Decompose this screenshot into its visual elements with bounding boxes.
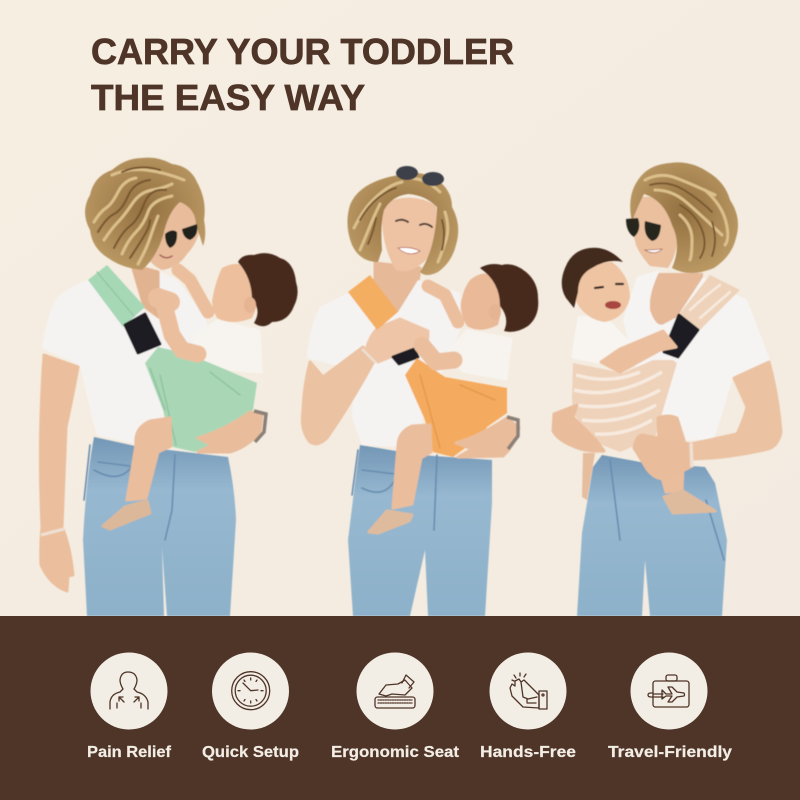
baby face bbox=[212, 264, 258, 322]
baby shirt bbox=[194, 321, 261, 372]
background bbox=[0, 0, 800, 616]
neck bbox=[132, 265, 159, 317]
icon: suitcase and plane bbox=[648, 675, 689, 707]
watch bbox=[507, 417, 518, 449]
jeans details bbox=[610, 460, 724, 560]
pouch bbox=[572, 360, 677, 452]
face bbox=[143, 197, 200, 270]
baby arm bbox=[601, 331, 676, 372]
baby face bbox=[461, 273, 501, 330]
hair curls bbox=[94, 167, 184, 264]
icon: hand gesture bbox=[510, 673, 547, 709]
t-shirt bbox=[42, 272, 207, 444]
feature: ergonomic seat bbox=[331, 652, 459, 761]
footer band bbox=[0, 616, 800, 800]
strap stripes bbox=[690, 285, 730, 318]
label: Pain Relief bbox=[87, 744, 172, 761]
hair bbox=[630, 162, 738, 273]
feature: pain relief bbox=[87, 652, 172, 761]
mother right hand bbox=[456, 418, 519, 457]
mother hand bbox=[366, 319, 428, 362]
sunglasses bbox=[165, 224, 197, 248]
hair curls bbox=[645, 175, 728, 260]
baby hair bbox=[562, 248, 623, 308]
strap fold bbox=[97, 272, 134, 316]
baby ear bbox=[489, 304, 501, 320]
bracelet bbox=[691, 443, 692, 467]
t-shirt bbox=[307, 280, 460, 448]
figure: mother with mint carrier bbox=[40, 158, 298, 616]
pouch bbox=[405, 358, 507, 457]
buckle bbox=[125, 314, 160, 353]
mother right hand bbox=[198, 412, 262, 452]
bracelet bbox=[362, 349, 376, 363]
shoe bbox=[369, 511, 412, 533]
title: CARRY YOUR TODDLER bbox=[91, 31, 514, 72]
jeans details bbox=[352, 450, 437, 530]
icon: clock bbox=[232, 672, 270, 710]
label: Ergonomic Seat bbox=[331, 744, 459, 761]
zebra stripes bbox=[574, 372, 662, 434]
pouch folds bbox=[420, 375, 495, 448]
bracelet bbox=[41, 529, 64, 535]
buckle bbox=[664, 315, 698, 357]
mother arm bbox=[302, 347, 373, 444]
strap bbox=[677, 275, 740, 330]
circle bbox=[490, 652, 566, 730]
label: Hands-Free bbox=[480, 744, 576, 761]
t-shirt bbox=[623, 270, 770, 440]
circle bbox=[212, 652, 289, 730]
figure: mother with zebra carrier bbox=[553, 162, 781, 616]
baby leg bbox=[658, 416, 684, 492]
baby hair bbox=[480, 264, 538, 332]
icon: shoulders bbox=[110, 672, 148, 709]
baby mouth bbox=[605, 301, 621, 309]
strap bbox=[348, 275, 398, 330]
baby eyes bbox=[595, 284, 623, 288]
baby face bbox=[575, 262, 630, 322]
hair bbox=[347, 173, 458, 275]
face bbox=[630, 197, 678, 268]
jeans bbox=[348, 445, 492, 616]
other foot bbox=[582, 453, 595, 500]
icon: hand on cushion bbox=[375, 675, 415, 708]
title bbox=[91, 31, 514, 118]
baby leg bbox=[393, 425, 431, 508]
sunglasses on head bbox=[396, 166, 444, 186]
smile bbox=[160, 255, 172, 258]
baby leg bbox=[127, 418, 171, 500]
baby arms bbox=[158, 270, 208, 354]
jeans bbox=[83, 437, 236, 616]
baby hair bbox=[238, 253, 298, 326]
mother hands bbox=[553, 405, 692, 479]
jeans bbox=[577, 455, 727, 616]
jeans details bbox=[84, 445, 175, 540]
mother right arm bbox=[691, 362, 781, 459]
pouch bbox=[145, 347, 257, 452]
feature: quick setup bbox=[202, 652, 299, 761]
figure: mother with orange carrier bbox=[302, 166, 538, 616]
baby ear bbox=[244, 297, 256, 313]
watch bbox=[254, 411, 266, 442]
hair bbox=[85, 158, 205, 270]
smile bbox=[645, 249, 662, 253]
neck bbox=[375, 263, 420, 317]
circle bbox=[630, 652, 708, 730]
eyes bbox=[396, 220, 432, 227]
neck bbox=[650, 273, 703, 325]
feature: hands-free bbox=[480, 652, 576, 761]
face bbox=[382, 198, 437, 271]
baby shirt bbox=[573, 316, 632, 362]
mother left arm and hand bbox=[40, 355, 78, 591]
pouch folds bbox=[150, 368, 240, 445]
sunglasses bbox=[626, 218, 661, 241]
shoe bbox=[664, 491, 715, 513]
title: THE EASY WAY bbox=[91, 77, 365, 118]
shoe bbox=[103, 501, 150, 529]
baby shirt bbox=[448, 331, 511, 379]
label: Travel-Friendly bbox=[608, 744, 732, 761]
strap bbox=[88, 265, 145, 327]
circle bbox=[356, 652, 434, 730]
circle bbox=[90, 652, 168, 730]
smile bbox=[398, 247, 420, 254]
hair curls bbox=[354, 178, 448, 262]
label: Quick Setup bbox=[202, 744, 299, 761]
buckle bbox=[393, 349, 418, 364]
baby arms bbox=[422, 286, 458, 362]
feature: travel-friendly bbox=[608, 652, 732, 761]
